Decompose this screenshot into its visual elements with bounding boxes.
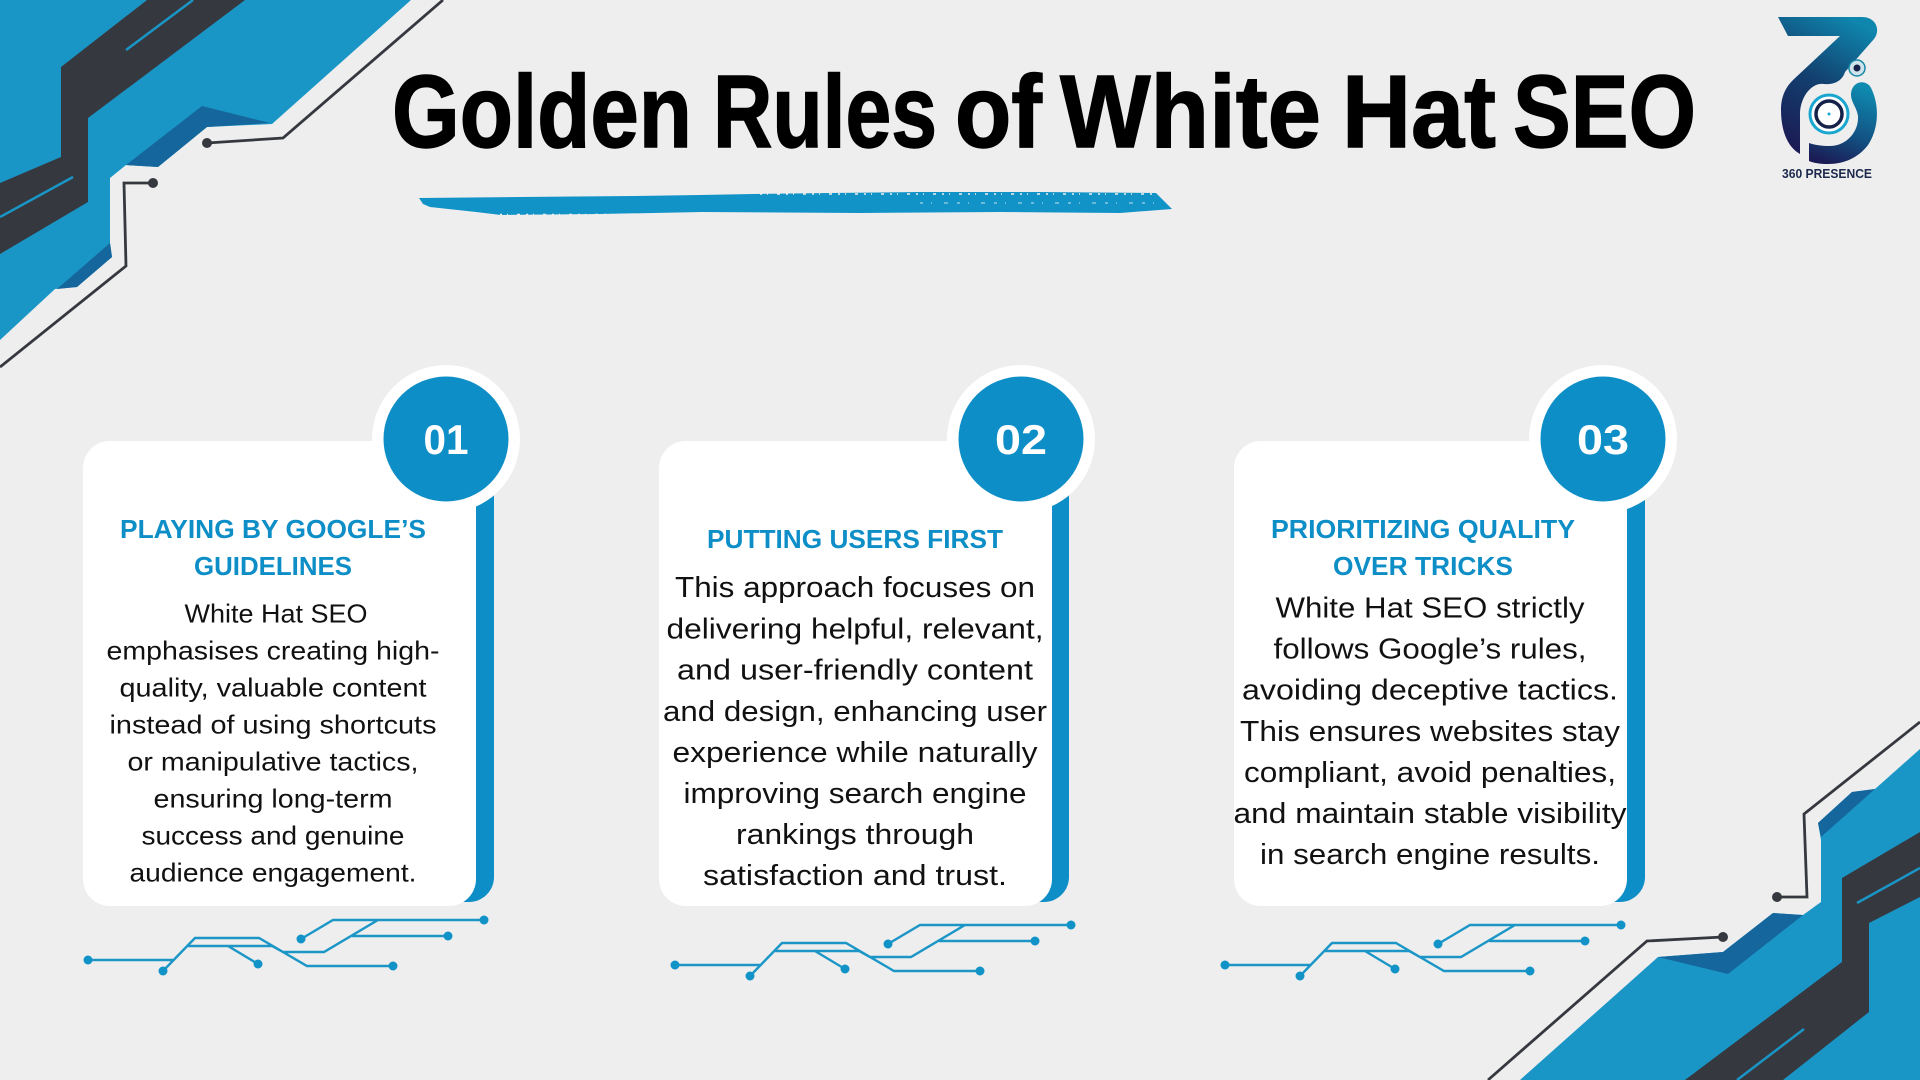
- body text 03: and maintain stable visibility: [1234, 798, 1627, 830]
- number badge 02: [947, 365, 1095, 513]
- body text 02: improving search engine: [684, 778, 1026, 810]
- brush underline: [419, 192, 1172, 215]
- body text 03: [1234, 592, 1627, 871]
- title: White: [1060, 54, 1321, 169]
- heading 01: GUIDELINES: [194, 551, 352, 581]
- logo lens small: [1849, 60, 1865, 76]
- logo seven mark: [1778, 17, 1877, 154]
- body text 01: audience engagement.: [130, 858, 416, 888]
- body text 01: White Hat SEO: [184, 598, 368, 628]
- body text 03: This ensures websites stay: [1240, 716, 1621, 748]
- body text 01: success and genuine: [142, 820, 404, 850]
- title: SEO: [1513, 54, 1696, 169]
- decoration: top-left corner: [0, 0, 443, 367]
- title: of: [955, 54, 1043, 169]
- body text 02: rankings through: [736, 819, 974, 851]
- panel: card 02: [659, 365, 1095, 906]
- number badge 03: [1529, 365, 1677, 513]
- body text 02: and user-friendly content: [677, 654, 1033, 686]
- title: Hat: [1342, 54, 1496, 169]
- circuit graphic 2: [670, 920, 1076, 980]
- logo: 360 Presence: [1778, 17, 1877, 181]
- title: Golden: [392, 54, 692, 169]
- title: Rules: [713, 54, 937, 169]
- number badge 01: 01: [424, 416, 468, 463]
- number badge 03: 03: [1577, 416, 1629, 463]
- panel: card 01: [83, 365, 520, 906]
- heading 03: PRIORITIZING QUALITY: [1271, 514, 1575, 544]
- body text 03: White Hat SEO strictly: [1276, 592, 1585, 624]
- number badge 02: 02: [995, 416, 1047, 463]
- body text 01: instead of using shortcuts: [110, 710, 436, 740]
- body text 02: This approach focuses on: [675, 572, 1035, 604]
- heading 01: PLAYING BY GOOGLE’S: [120, 514, 426, 544]
- body text 01: [106, 598, 440, 888]
- body text 03: compliant, avoid penalties,: [1244, 757, 1616, 789]
- number badge 01: [372, 365, 520, 513]
- heading 02: PUTTING USERS FIRST: [707, 524, 1003, 554]
- circuit graphic 1: [84, 916, 488, 976]
- body text 01: quality, valuable content: [120, 672, 427, 702]
- logo lens large: [1810, 95, 1848, 133]
- body text 01: emphasises creating high-: [106, 636, 440, 666]
- body text 02: [663, 572, 1047, 892]
- circuit graphic 3: [1220, 920, 1626, 980]
- body text 01: or manipulative tactics,: [128, 746, 418, 776]
- body text 02: delivering helpful, relevant,: [666, 614, 1044, 646]
- body text 03: avoiding deceptive tactics.: [1242, 674, 1618, 706]
- decoration: bottom-right corner: [1488, 722, 1920, 1080]
- panel: card 03: [1234, 365, 1677, 906]
- logo wordmark: 360 PRESENCE: [1782, 167, 1872, 181]
- heading 03: OVER TRICKS: [1333, 551, 1513, 581]
- body text 03: in search engine results.: [1260, 839, 1600, 871]
- body text 02: satisfaction and trust.: [703, 860, 1007, 892]
- body text 03: follows Google’s rules,: [1274, 634, 1586, 666]
- logo bowl mark: [1809, 82, 1877, 164]
- body text 02: and design, enhancing user: [663, 696, 1047, 728]
- body text 02: experience while naturally: [672, 737, 1038, 769]
- body text 01: ensuring long-term: [154, 784, 392, 814]
